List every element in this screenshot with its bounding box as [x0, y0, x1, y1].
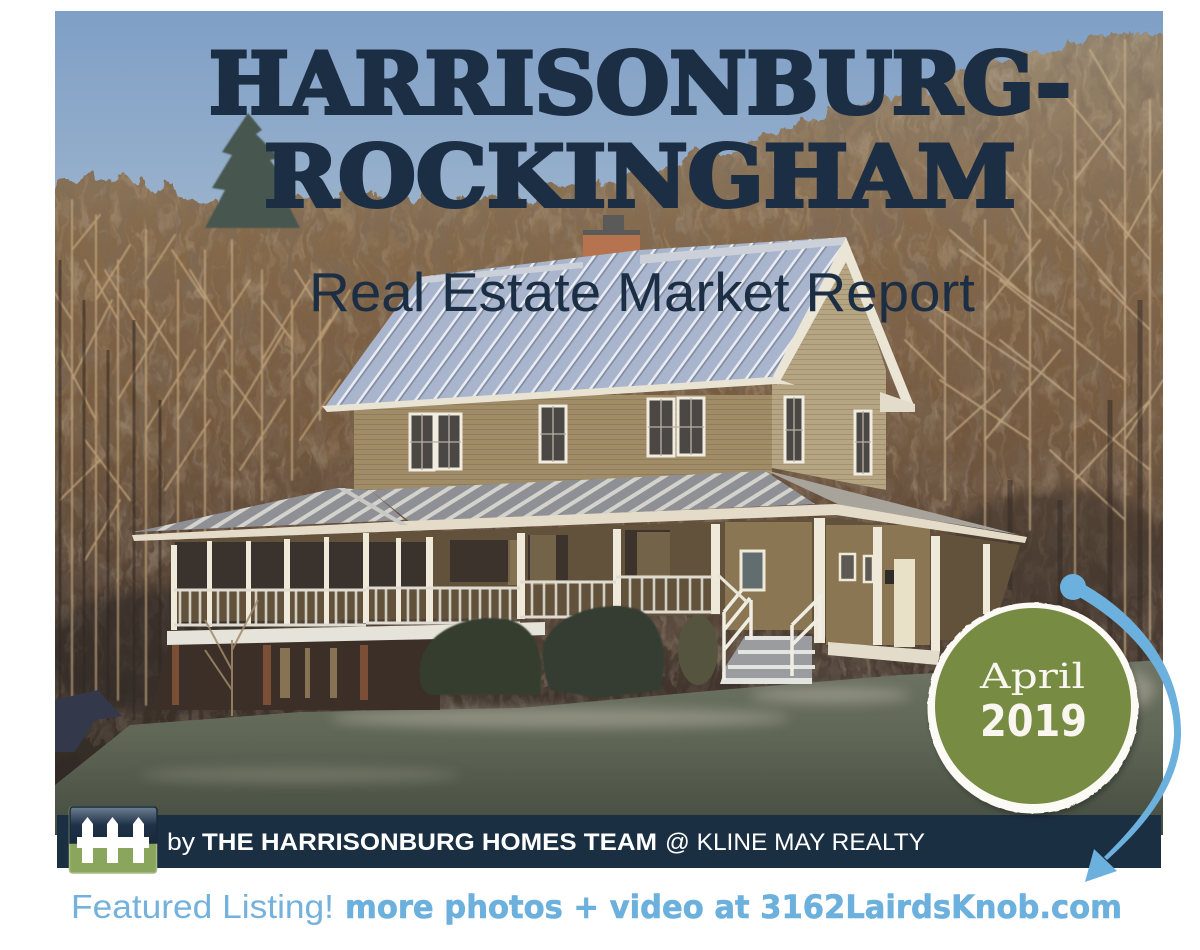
dark screen porch interior	[175, 542, 430, 590]
porch railings	[174, 577, 712, 625]
arrow to website	[1060, 574, 1181, 882]
sapling	[205, 600, 258, 716]
banner text: brokerage: @ KLINE MAY REALTY	[665, 829, 925, 856]
upper storey front wall	[354, 395, 772, 490]
deck band	[167, 622, 545, 645]
pine tree	[205, 113, 300, 228]
upper windows	[410, 397, 871, 474]
banner text: by: by	[167, 829, 195, 856]
lit door panels	[508, 532, 670, 585]
bushes	[419, 618, 541, 695]
porch roof centre	[370, 471, 815, 522]
title: ROCKINGHAM	[264, 127, 1016, 226]
porch openings	[450, 530, 670, 582]
bush right	[543, 606, 664, 698]
shed	[55, 690, 122, 752]
date badge	[928, 602, 1140, 816]
shrub	[678, 615, 718, 685]
lawn	[55, 660, 1163, 835]
porch shaded back wall	[175, 518, 1020, 640]
small side windows	[840, 554, 873, 582]
chimney cap	[583, 215, 640, 235]
hip ridge	[337, 488, 408, 525]
porch roof left	[134, 488, 405, 532]
chimney	[583, 232, 640, 270]
title: HARRISONBURG-	[209, 34, 1071, 133]
featured listing caption: Featured Listing!	[71, 888, 334, 925]
forest backdrop	[55, 30, 1163, 785]
ridge cap	[415, 237, 846, 284]
under-deck shade	[150, 640, 440, 710]
porch fascia	[132, 504, 1027, 543]
banner text: team name: THE HARRISONBURG HOMES TEAM	[202, 829, 657, 856]
frost on lawn	[140, 668, 1155, 783]
wall window by stairs	[741, 551, 764, 590]
website callout: more photos + video at 3162LairdsKnob.com	[345, 888, 1122, 926]
side porch deck	[828, 642, 940, 665]
title	[209, 34, 1071, 226]
stairs	[718, 575, 822, 684]
gable trim	[772, 237, 915, 410]
bare trees left	[40, 200, 350, 720]
main roof fascia	[322, 377, 795, 412]
under-deck posts	[172, 645, 368, 705]
upper storey gable wall	[772, 245, 886, 490]
house	[132, 215, 1027, 710]
lit front walls	[725, 522, 930, 645]
subtitle: Real Estate Market Report	[309, 261, 975, 323]
porch columns	[171, 518, 990, 651]
porch roof right	[765, 470, 1020, 535]
badge year: 2019	[980, 696, 1087, 747]
front door	[894, 559, 915, 647]
badge month: April	[979, 657, 1085, 697]
bare trees right	[905, 40, 1163, 700]
featured listing caption	[71, 888, 1122, 926]
banner	[57, 815, 1161, 868]
lantern	[885, 570, 894, 584]
logo: white picket fence	[70, 807, 157, 873]
main metal roof	[324, 237, 846, 408]
gable eave box	[880, 392, 915, 412]
window muntins	[410, 397, 871, 474]
lit trunks under deck	[280, 648, 337, 698]
sky	[55, 11, 1163, 204]
